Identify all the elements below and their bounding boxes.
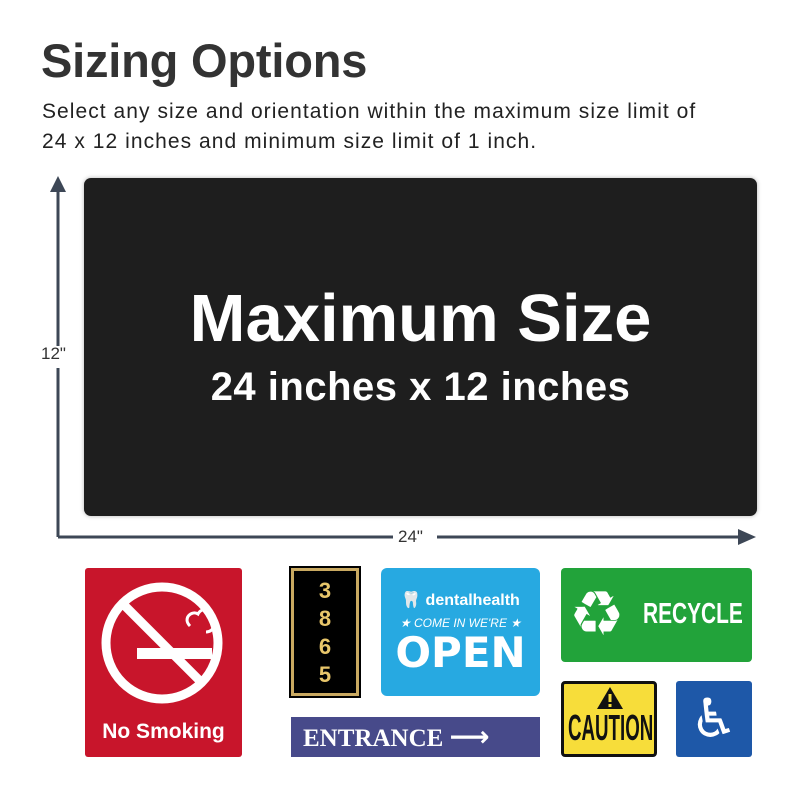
sign: dental open: ★ COME IN WE'RE ★ — [400, 616, 521, 630]
subtitle: Select any size and orientation within the maximum size limit of — [42, 100, 696, 123]
sign: no smoking: No Smoking — [102, 720, 225, 743]
sign: entrance: ENTRANCE ⟶ — [303, 720, 490, 753]
panel: maximum size board — [84, 178, 757, 516]
sign: caution — [561, 681, 657, 757]
sign: address number 3865: 6 — [319, 634, 331, 659]
sign: accessible: ♿ — [690, 687, 738, 750]
subtitle — [42, 100, 696, 153]
subtitle: 24 x 12 inches and minimum size limit of 1 inch. — [42, 130, 537, 153]
sign: recycle — [561, 568, 752, 662]
text: dimensions: 24 inches x 12 inches — [211, 365, 630, 409]
sign: dental open: 🦷 dentalhealth — [401, 592, 520, 609]
sign: address number 3865 — [291, 568, 359, 696]
label: 12 inches: 12" — [41, 344, 66, 363]
sign: address number 3865: 5 — [319, 662, 331, 687]
sign: accessible — [676, 681, 752, 757]
sign: recycle: ♻ — [569, 577, 625, 650]
sign: no smoking — [85, 568, 242, 757]
dimension arrows — [50, 176, 756, 545]
sign: dental open — [381, 568, 540, 696]
sign: entrance — [291, 717, 540, 757]
title: Sizing Options — [41, 34, 367, 87]
sign: address number 3865: 8 — [319, 606, 331, 631]
sign: address number 3865: 3 — [319, 578, 331, 603]
sign: dental open: OPEN — [395, 628, 526, 677]
label: 24 inches: 24" — [398, 527, 423, 546]
heading: maximum size: Maximum Size — [190, 281, 651, 356]
sign: caution: CAUTION — [568, 707, 653, 748]
sign: recycle: RECYCLE — [643, 598, 743, 630]
